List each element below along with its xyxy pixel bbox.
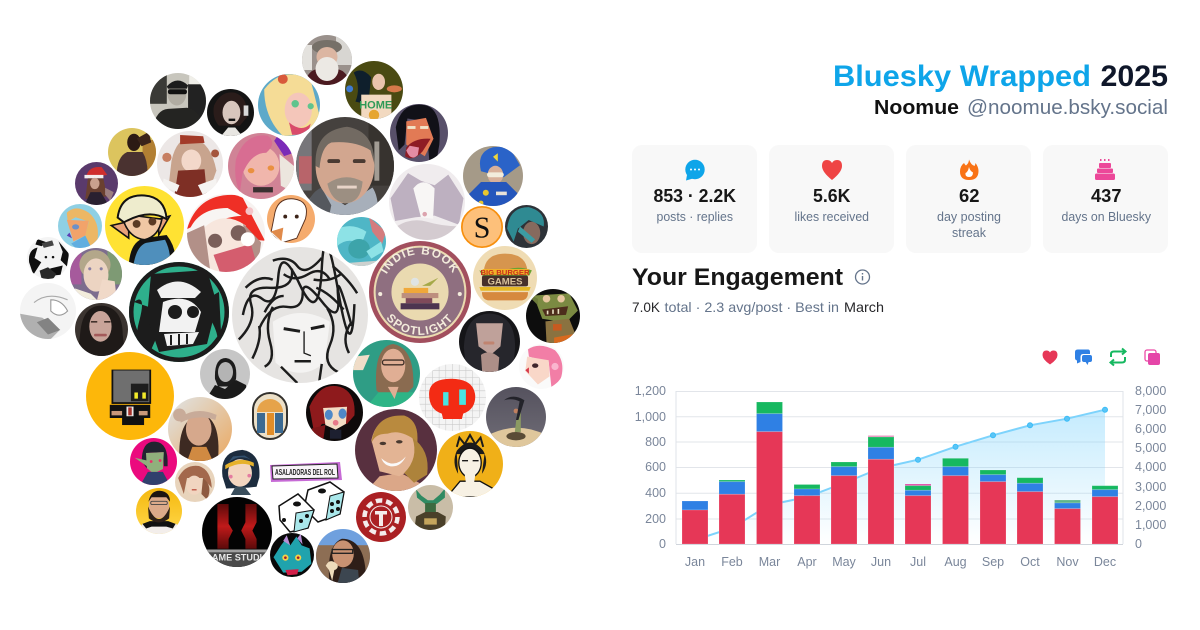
avatar: blonde cartoon on light blue: [58, 204, 102, 248]
avatar: letter S: [461, 206, 503, 248]
month labels: May: [832, 555, 857, 569]
bar: Aug: [942, 458, 968, 544]
avatar bubble cluster: [20, 35, 580, 583]
engagement summary: March: [844, 299, 884, 315]
month labels: Nov: [1056, 555, 1079, 569]
stat card: posts and replies: [632, 145, 757, 253]
left axis labels: 400: [645, 486, 666, 500]
avatar: Indie Book Spotlight badge: [369, 241, 471, 343]
icon: likes: [1042, 350, 1058, 364]
right axis labels: 3,000: [1135, 480, 1166, 494]
line points: [692, 407, 1108, 542]
engagement heading: Your Engagement: [632, 264, 843, 291]
bar: Apr: [794, 484, 820, 544]
stat label: [937, 210, 1001, 240]
avatar: green goblin: [526, 289, 580, 343]
avatar: santa hat anime girl: [187, 194, 265, 272]
avatar: miniature figure: [486, 387, 546, 447]
cumulative area: [695, 410, 1105, 544]
right axis labels: 7,000: [1135, 403, 1166, 417]
avatar: home illustration: HOME: [359, 100, 392, 112]
avatar: sepia art nouveau portrait: [175, 462, 215, 502]
right axis labels: 6,000: [1135, 422, 1166, 436]
avatar: man in sunglasses: [150, 73, 206, 129]
stat label: day posting: [937, 210, 1001, 224]
right axis labels: [1135, 384, 1166, 551]
bar: Jul: [905, 484, 931, 544]
avatar: gray-haired man with goatee, large: [296, 117, 394, 215]
avatar: letter S: S: [474, 210, 490, 244]
avatar: teal monster: [270, 533, 314, 577]
icon: heart: [822, 160, 842, 180]
avatar: woman with bear ears headband: [168, 397, 232, 461]
display name and handle: Noomue: [874, 97, 959, 119]
avatar: antlered warrior: [408, 485, 453, 530]
engagement summary: [632, 299, 884, 315]
stat value: 853 · 2.2K: [654, 186, 736, 206]
display name and handle: @noomue.bsky.social: [967, 97, 1168, 119]
avatar: pink-haired anime girl: [228, 133, 294, 199]
avatar: teal-haired figure: [505, 205, 548, 248]
left axis labels: 1,200: [635, 384, 666, 398]
month labels: [685, 555, 1116, 569]
month labels: Apr: [797, 555, 817, 569]
cumulative line: [695, 410, 1105, 540]
bar: May: [831, 462, 857, 544]
avatar: Big Burger Games logo: BIG BURGER: [480, 268, 530, 277]
right axis labels: 5,000: [1135, 441, 1166, 455]
banner: Asaladoras del Rol: [270, 462, 342, 482]
avatar: Indie Book Spotlight badge: INDIE BOOK: [380, 246, 460, 274]
avatar: white cartoon on orange: [267, 195, 315, 243]
month labels: Aug: [944, 555, 967, 569]
month labels: Oct: [1020, 555, 1040, 569]
right axis labels: 4,000: [1135, 460, 1166, 474]
bar: Jan: [682, 501, 708, 544]
left axis labels: 200: [645, 512, 666, 526]
avatar: home illustration: [345, 61, 403, 119]
icon: birthday cake: [1095, 159, 1115, 180]
avatar: cap'n crunch costume: [463, 146, 523, 206]
avatar: blonde elf with blue background: [258, 74, 320, 136]
stat label: likes received: [794, 210, 869, 224]
avatar: skull on green: [129, 262, 229, 362]
avatar: goth woman with dark hair: [207, 89, 254, 136]
icon: replies: [1075, 350, 1092, 365]
icon: quotes: [1145, 350, 1160, 365]
month labels: Jul: [910, 555, 926, 569]
stat card: days on Bluesky: [1043, 145, 1168, 253]
bar: Oct: [1017, 478, 1043, 544]
avatar: red face with fangs: [390, 104, 448, 162]
avatar: gray sketch: [20, 283, 76, 339]
avatar: yellow character with gray helmet: [86, 352, 174, 440]
month labels: Jun: [871, 555, 891, 569]
icon: speech bubble: [685, 160, 705, 180]
right axis labels: 2,000: [1135, 499, 1166, 513]
avatar: bearded man on yellow: [136, 488, 182, 534]
avatar: black and white line-art portrait: [232, 247, 368, 383]
stat value: 5.6K: [813, 186, 850, 206]
avatar: red-haired anime girl: [306, 384, 363, 441]
avatar: black and white manga: [27, 237, 69, 279]
avatar: smiling blonde woman: [355, 409, 437, 491]
avatar: KR game studio logo: GAME STUDIO: [205, 553, 269, 563]
avatar: woman with black hair and hand on chin: [459, 311, 520, 372]
stat card: likes: [769, 145, 894, 253]
engagement summary: total · 2.3 avg/post · Best in: [664, 299, 839, 315]
stat value: 437: [1091, 186, 1122, 206]
avatar: lilac pencil sketch: [389, 164, 465, 240]
chart legend: [1042, 348, 1160, 366]
bar: Jun: [868, 436, 894, 544]
bar: Nov: [1054, 500, 1080, 544]
right axis labels: 0: [1135, 537, 1142, 551]
avatar: teal sketchy painting: [337, 217, 386, 266]
avatar: headband anime girl: [222, 450, 260, 495]
icon: pair of dice: [278, 481, 345, 533]
bar: Dec: [1092, 486, 1118, 544]
stat value: 62: [959, 186, 980, 206]
title: 2025: [1100, 60, 1168, 93]
title: Bluesky Wrapped: [833, 60, 1091, 93]
stat label: streak: [952, 226, 987, 240]
stat card: streak: [906, 145, 1031, 253]
avatar: goblin on magenta: [130, 438, 177, 485]
avatar: woman on teal background: [353, 340, 420, 407]
avatar: smiling woman hand on cheek: [70, 248, 122, 300]
avatar: man on yellow background: [108, 128, 156, 176]
left axis labels: 1,000: [635, 410, 666, 424]
avatar: blonde elf on yellow: [105, 186, 184, 265]
avatar: red poker chip: [356, 492, 406, 542]
month labels: Dec: [1094, 555, 1116, 569]
month labels: Jan: [685, 555, 705, 569]
avatar: queen line art on yellow: [437, 431, 503, 497]
left axis labels: 800: [645, 435, 666, 449]
bar: Mar: [756, 402, 782, 544]
avatar: woman with long dark hair: [75, 303, 128, 356]
avatar: pink hair illustration: [525, 346, 562, 387]
avatar: woman with ice cream: [316, 529, 370, 583]
right axis labels: 8,000: [1135, 384, 1166, 398]
display name and handle: [874, 97, 1168, 119]
chart: monthly engagement: [635, 384, 1166, 569]
avatar: bearded man in cap: [302, 35, 352, 85]
icon: reposts: [1110, 348, 1126, 366]
avatar: woman with glasses, grayscale: [200, 349, 250, 399]
icon: flame: [960, 160, 978, 180]
month labels: Feb: [721, 555, 743, 569]
bar: Feb: [719, 480, 745, 544]
avatar: anime girl in red and white dress: [157, 131, 223, 197]
avatar: Indie Book Spotlight badge: SPOTLIGHT: [387, 314, 452, 335]
avatar: woman with santa hat: [75, 162, 118, 205]
stat label: days on Bluesky: [1062, 210, 1152, 224]
bar: Sep: [980, 470, 1006, 544]
header: [833, 60, 1168, 119]
icon: info: [856, 270, 870, 284]
stat label: posts · replies: [656, 210, 733, 224]
left axis labels: [635, 384, 666, 551]
avatar: KR game studio logo: [202, 497, 272, 567]
avatar: Big Burger Games logo: GAMES: [487, 276, 523, 287]
left axis labels: 0: [659, 537, 666, 551]
engagement summary: 7.0K: [632, 299, 661, 315]
avatar: red skull on grid: [419, 364, 486, 431]
gridlines: [676, 391, 1123, 544]
avatar: Big Burger Games logo: [473, 246, 537, 310]
stacked bars: [682, 402, 1118, 544]
month labels: Mar: [759, 555, 780, 569]
left axis labels: 600: [645, 460, 666, 474]
avatar: stained-glass arch: [252, 392, 288, 440]
month labels: Sep: [982, 555, 1004, 569]
right axis labels: 1,000: [1135, 518, 1166, 532]
